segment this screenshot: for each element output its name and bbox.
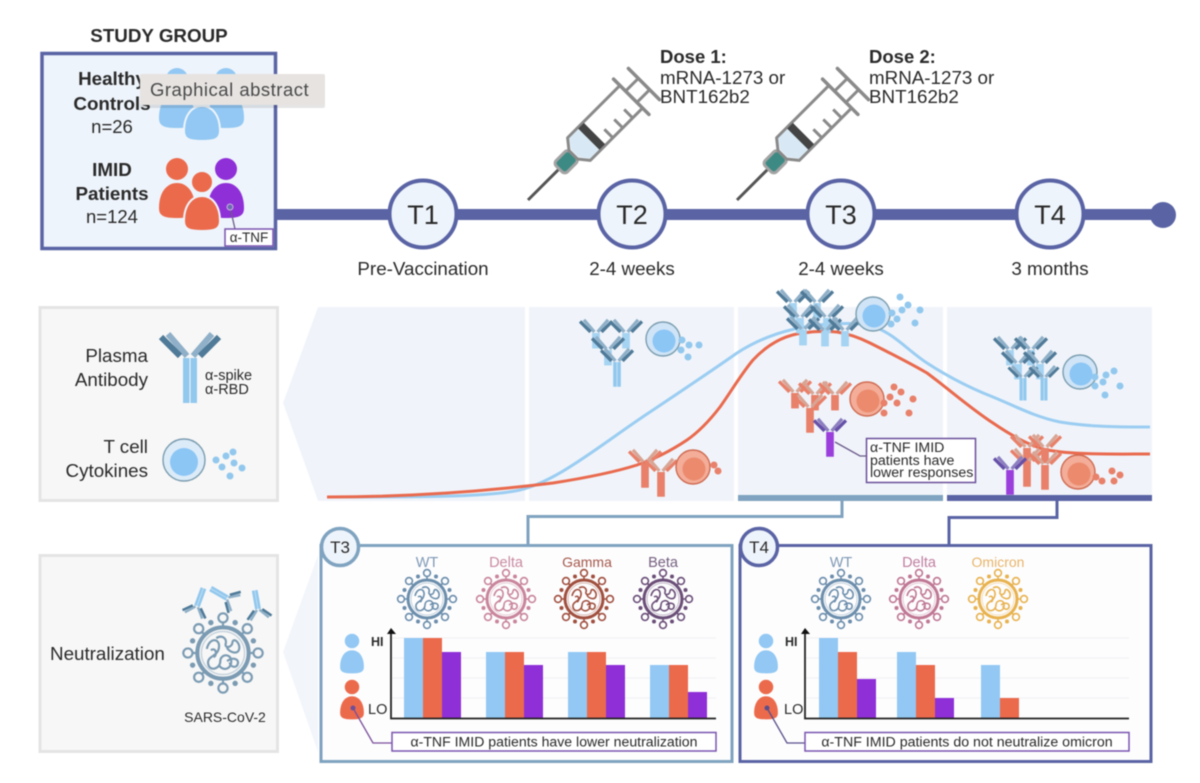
- icon: virus WT: [812, 570, 870, 628]
- bar chart T3: [368, 628, 716, 718]
- legend: person icons: [340, 634, 364, 719]
- icon: antibody: [161, 334, 219, 403]
- text: dose 1: BNT162b2: [660, 86, 750, 107]
- icon: virus Delta: [890, 570, 948, 628]
- callout: lower neutralization: α-TNF IMID patients have lower neutralization: [410, 734, 698, 750]
- panel: T3 neutralization: [321, 528, 732, 762]
- label: IMID patients: [75, 159, 149, 227]
- tooltip: graphical abstract: Graphical abstract: [150, 79, 309, 100]
- callout: alpha-TNF: α-TNF: [230, 230, 268, 245]
- timepoint T4: [1016, 180, 1084, 248]
- text: dose 2: BNT162b2: [869, 86, 959, 107]
- bracket connector T3: [528, 495, 943, 545]
- callout: lower neutralization: [350, 706, 716, 751]
- label: T cell cytokines: [66, 436, 148, 481]
- timepoint labels: 2-4 weeks: [798, 258, 884, 279]
- callout: lower responses: patients have: [870, 453, 955, 469]
- timepoint T1: [390, 180, 456, 248]
- T3 red antibodies and cell: [779, 380, 916, 433]
- curve: healthy controls: [327, 323, 1150, 497]
- callout: omicron: α-TNF IMID patients do not neutralize omicron: [821, 734, 1113, 750]
- bar chart T4: [784, 628, 1129, 718]
- icon: virus Omicron: [969, 570, 1027, 628]
- icon: IMID patients group: [159, 158, 244, 231]
- heading: study group: STUDY GROUP: [90, 25, 228, 46]
- panel: legend plasma antibody and T cell: [40, 308, 278, 500]
- icon: virus Gamma: [555, 570, 613, 628]
- panel: neutralization legend: [40, 556, 278, 752]
- timepoint T1: T1: [407, 200, 439, 230]
- text: dose 2: Dose 2:: [869, 46, 936, 67]
- timepoint T3: [808, 180, 874, 248]
- callout: lower responses: lower responses: [870, 465, 973, 481]
- background band behind neutralization: [283, 555, 318, 752]
- curve: IMID patients: [327, 331, 1150, 497]
- text: dose 2: mRNA-1273 or: [869, 67, 994, 88]
- T3 purple antibody: [814, 419, 846, 457]
- label: neutralization: Neutralization: [50, 643, 165, 664]
- badge T3: T3: [330, 538, 350, 557]
- timepoint T2: [598, 180, 666, 248]
- T3 blue antibodies and cell: [777, 290, 924, 346]
- panel: T4 neutralization: [740, 528, 1151, 762]
- timepoint T4: T4: [1034, 200, 1066, 230]
- callout: omicron: [764, 706, 1129, 751]
- variant labels: WT: [416, 555, 438, 571]
- variant labels: WT: [830, 555, 852, 571]
- icon: virus WT: [398, 570, 456, 628]
- text: dose 1: [660, 46, 785, 107]
- bar chart T3: LO: [368, 702, 387, 718]
- variant labels: Gamma: [562, 554, 612, 570]
- tooltip: graphical abstract: [140, 74, 325, 108]
- icon: virus Beta: [634, 570, 692, 628]
- label: plasma antibody: Antibody: [75, 369, 149, 390]
- T2 red antibodies and cell: [629, 450, 722, 497]
- label: plasma antibody: [75, 345, 149, 390]
- icon: bound antibodies: [182, 578, 272, 621]
- callout: lower responses: α-TNF IMID: [870, 440, 944, 456]
- T2 blue antibodies and cell: [580, 320, 702, 387]
- timepoint labels: [357, 258, 1089, 279]
- label: IMID patients: IMID: [92, 159, 132, 180]
- bar chart T4: LO: [784, 702, 803, 718]
- T4 purple antibody: [994, 457, 1026, 495]
- label: IMID patients: Patients: [75, 183, 149, 204]
- icon: SARS-CoV-2 virus: [183, 613, 263, 693]
- panel: study group: [42, 54, 276, 248]
- label: healthy controls: [73, 68, 151, 137]
- timepoint labels: Pre-Vaccination: [357, 258, 489, 279]
- timepoint T2: T2: [616, 200, 648, 230]
- label: healthy controls: Controls: [73, 93, 151, 114]
- icon: T cell: [163, 439, 205, 481]
- variant labels: [416, 554, 679, 571]
- variant labels: Delta: [489, 555, 524, 571]
- callout: alpha-TNF: [225, 204, 273, 246]
- variant labels: Omicron: [972, 554, 1024, 570]
- variant labels: Delta: [902, 555, 937, 571]
- callout: lower responses: [835, 438, 976, 482]
- icon: virus Delta: [477, 570, 535, 628]
- label: T cell cytokines: Cytokines: [66, 460, 148, 481]
- label: plasma antibody: Plasma: [85, 345, 149, 366]
- timepoint T3: T3: [825, 200, 857, 230]
- icon: syringe dose 2: [719, 66, 871, 218]
- badge T3: [322, 528, 358, 566]
- panel: response curve chart: [283, 290, 1152, 501]
- text: dose 1: mRNA-1273 or: [660, 67, 785, 88]
- timeline: [277, 180, 1176, 248]
- label: healthy controls: Healthy: [78, 68, 146, 89]
- variant labels: Beta: [648, 555, 679, 571]
- badge T4: T4: [749, 538, 769, 557]
- badge T4: [740, 528, 778, 566]
- label: T cell cytokines: T cell: [103, 436, 148, 457]
- label: antibody targets: [205, 368, 252, 398]
- variant labels: [830, 554, 1024, 571]
- timepoint labels: 3 months: [1011, 258, 1089, 279]
- label: healthy controls: n=26: [91, 116, 133, 137]
- icon: cytokines: [212, 448, 246, 480]
- T4 red antibodies and cell: [1011, 435, 1124, 490]
- legend: person icons: [754, 634, 778, 719]
- label: antibody targets: α-spike: [205, 368, 252, 384]
- timepoint labels: 2-4 weeks: [589, 258, 675, 279]
- text: dose 1: Dose 1:: [660, 46, 727, 67]
- T4 blue antibodies and cell: [994, 337, 1124, 400]
- label: SARS-CoV-2: SARS-CoV-2: [184, 709, 266, 725]
- text: dose 2: [869, 46, 994, 107]
- bracket connector T4: [947, 495, 1152, 545]
- bar chart T3: HI: [371, 635, 384, 649]
- icon: syringe dose 1: [510, 66, 662, 218]
- icon: healthy controls group: [159, 68, 244, 141]
- label: IMID patients: n=124: [86, 206, 138, 227]
- label: antibody targets: α-RBD: [205, 382, 249, 398]
- bar chart T4: HI: [785, 635, 798, 649]
